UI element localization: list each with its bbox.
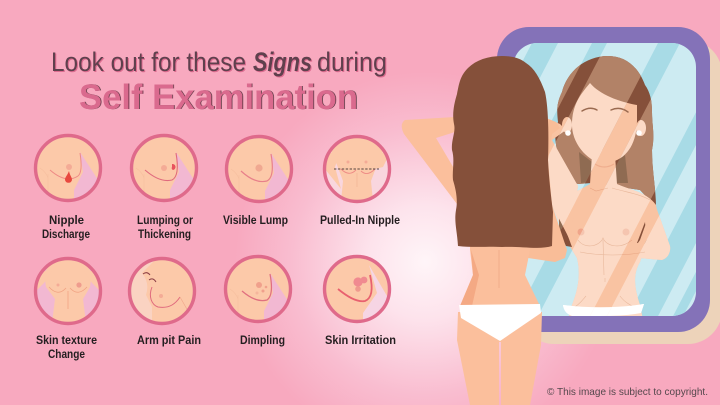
label: lumping or thickening: Thickening [138, 229, 191, 241]
icon: visible lump [226, 136, 293, 203]
label: lumping or thickening: Lumping or [137, 215, 193, 227]
title [51, 47, 387, 117]
title: Self Examination [79, 78, 358, 117]
icon: nipple discharge [36, 136, 102, 202]
label: nipple discharge: Discharge [42, 229, 90, 241]
mirror frame [497, 27, 710, 332]
icon: skin texture change [36, 258, 100, 324]
title: Look out for these [51, 47, 246, 77]
label: lumping or thickening [137, 215, 193, 241]
legs [457, 312, 542, 405]
icon: pulled-in nipple [324, 136, 390, 202]
icon: dimpling [226, 256, 292, 323]
title: during [317, 47, 387, 77]
title: Signs [253, 47, 312, 77]
label: visible lump: Visible Lump [223, 215, 288, 227]
raised arm [402, 117, 462, 208]
copyright notice: © This image is subject to copyright. [547, 386, 708, 398]
mirror shadow [520, 40, 720, 344]
label: nipple discharge [42, 215, 90, 241]
mirror glass [515, 43, 696, 316]
label: nipple discharge: Nipple [49, 215, 84, 227]
torso [460, 240, 540, 306]
icon: lumping or thickening [132, 136, 198, 202]
label: skin texture change: Change [48, 349, 85, 361]
label: skin texture change: Skin texture [36, 335, 97, 347]
underwear [459, 304, 541, 341]
label: pulled-in nipple: Pulled-In Nipple [320, 215, 400, 227]
icon: arm pit pain [130, 258, 196, 325]
label: skin texture change [36, 335, 97, 361]
woman from behind [402, 56, 567, 405]
label: dimpling: Dimpling [240, 335, 285, 347]
label: skin irritation: Skin Irritation [325, 335, 396, 347]
hair [452, 56, 553, 248]
mirror [497, 27, 720, 344]
label: arm pit pain: Arm pit Pain [137, 335, 201, 347]
right arm [525, 118, 567, 262]
icon: skin irritation [324, 256, 391, 323]
reflection of woman [546, 56, 670, 320]
